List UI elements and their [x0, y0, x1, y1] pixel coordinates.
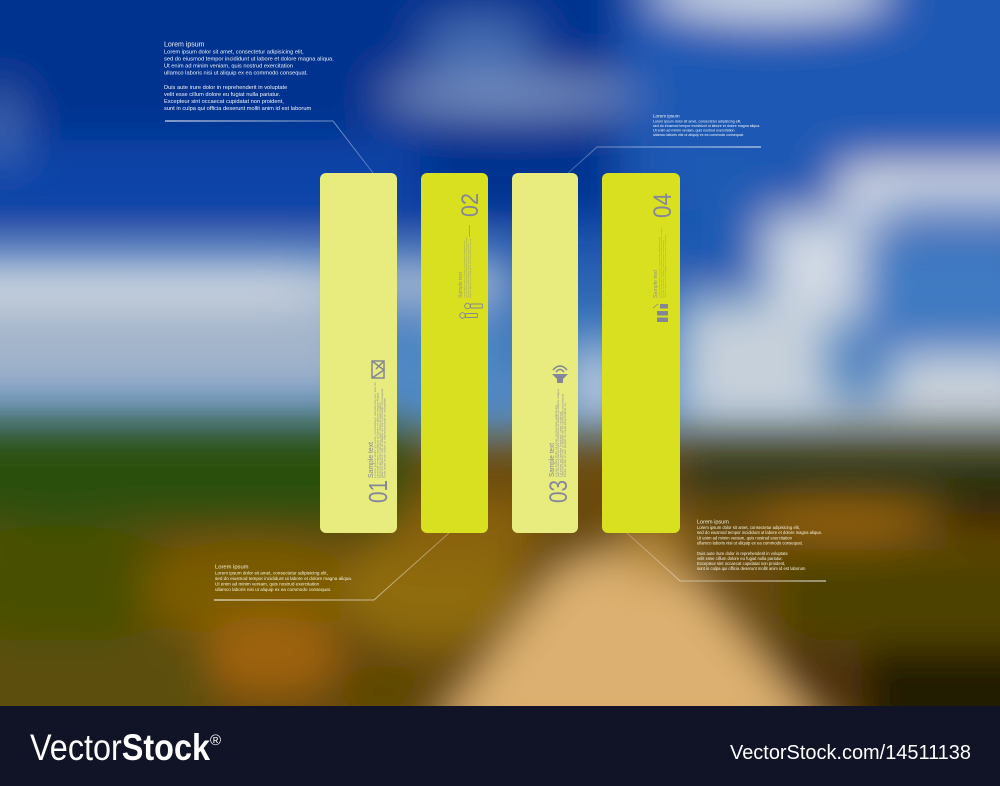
callout line: top right — [568, 147, 761, 173]
text block: top right: Ut enim ad minim veniam, quis nostrud exercitation — [653, 128, 734, 132]
body lines 3: sed do eiusmod tempor incididunt ut labore et dolore magna — [556, 388, 560, 477]
bar 4 — [602, 173, 680, 533]
text block: top left: Ut enim ad minim veniam, quis nostrud exercitation — [164, 64, 293, 70]
text block: bottom left: Ut enim ad minim veniam, quis nostrud exercitation — [215, 582, 320, 586]
number 03: 03 — [545, 480, 573, 503]
body lines 4: Lorem ipsum dolor sit amet, consectetur adipisicing elit, — [658, 236, 661, 298]
callout line: bottom left — [214, 533, 449, 600]
text block: top left: Duis aute irure dolor in reprehenderit in voluptate — [164, 85, 287, 91]
text block: top right: ullamco laboris nisi ut aliquip ex ea commodo consequat. — [653, 133, 744, 137]
bar 3 content — [545, 366, 573, 503]
sample text heading 2: Sample text — [458, 272, 464, 298]
body lines 2: Lorem ipsum dolor sit amet, consectetur adipisicing elit, — [463, 240, 466, 298]
callout line: top left — [165, 121, 373, 173]
body lines 2: Ut enim ad minim veniam, quis nostrud exercitation — [467, 242, 470, 298]
number 04: 04 — [649, 193, 677, 218]
body lines 4: Ut enim ad minim veniam, quis nostrud exercitation — [662, 239, 665, 298]
number 01: 01 — [363, 480, 393, 503]
body lines 3: ullamco laboris nisi ut aliquip ex ea commodo consequat. — [561, 393, 565, 477]
text block: top left: Lorem ipsum dolor sit amet, consectetur adipisicing elit, — [164, 50, 304, 56]
body lines 3: Lorem ipsum dolor sit amet, consectetur adipisicing — [554, 404, 558, 477]
body lines 1: eiusmod tempor incididunt ut labore et dolore magna aliqua. — [375, 392, 379, 478]
text block: top left — [164, 42, 334, 112]
body lines 1: Lorem ipsum dolor sit amet, consectetur adipisicing elit, sed do — [373, 381, 377, 478]
text block: bottom right: ullamco laboris nisi ut aliquip ex ea commodo consequat. — [697, 540, 803, 546]
text block: bottom left — [215, 564, 352, 592]
body lines 1: Duis aute irure dolor in reprehenderit in voluptate — [383, 397, 387, 478]
text block: bottom right: Lorem ipsum dolor sit amet, consectetur adipisicing elit, — [697, 525, 800, 530]
text block: top left: sed do eiusmod tempor incididunt ut labore et dolore magna aliqua. — [164, 56, 334, 62]
body lines 4: ullamco laboris nisi ut aliquip ex ea commodo consequat. — [664, 234, 667, 298]
text block: top right — [653, 114, 760, 137]
icon: wifi lamp — [552, 366, 568, 383]
sample text heading 1: Sample text — [368, 442, 375, 478]
text block: bottom right: Duis aute irure dolor in reprehenderit in voluptate — [697, 551, 788, 556]
text block: top left: Lorem ipsum — [164, 42, 205, 48]
bar 4 content — [649, 193, 677, 322]
bar 3 — [512, 173, 578, 533]
bar 2 content — [457, 193, 484, 318]
text block: bottom left: Lorem ipsum — [215, 564, 249, 570]
icon: bar chart — [653, 304, 668, 322]
text block: bottom left: sed do eiusmod tempor incididunt ut labore et dolore magna aliqua. — [215, 576, 352, 581]
divider line 2 — [468, 225, 471, 237]
number 02: 02 — [457, 193, 484, 217]
text block: bottom left: ullamco laboris nisi ut aliquip ex ea commodo consequat. — [215, 587, 331, 592]
body lines 4 — [658, 226, 667, 298]
icon: people — [460, 303, 482, 318]
body lines 2 — [463, 236, 472, 298]
bar 1 — [320, 173, 397, 533]
body lines 3: Ut enim ad minim veniam, quis nostrud — [558, 411, 562, 477]
body lines 1 — [373, 381, 387, 478]
text block: top right: sed do eiusmod tempor incididunt ut labore et dolore magna aliqua. — [653, 124, 760, 128]
sample text heading 4: Sample text — [653, 270, 659, 298]
text block: bottom right: velit esse cillum dolore eu fugiat nulla pariatur. — [697, 556, 783, 561]
callout line: bottom right — [627, 533, 826, 581]
body lines 1: Ut enim ad minim veniam, quis nostrud exercitation — [378, 401, 382, 478]
text block: top left: velit esse cillum dolore eu fugiat nulla pariatur. — [164, 92, 281, 98]
text block: top left: Excepteur sint occaecat cupidatat non proident, — [164, 99, 284, 105]
bar 2 — [421, 173, 488, 533]
bar 1 content — [363, 361, 393, 503]
text block: top left: sunt in culpa qui officia deserunt mollit anim id est laborum — [164, 106, 311, 112]
text block: bottom right: Lorem ipsum — [697, 520, 729, 526]
text block: bottom right: Excepteur sint occaecat cupidatat non proident, — [697, 561, 785, 566]
icon: envelope — [372, 361, 384, 378]
footer band — [0, 706, 1000, 786]
text block: bottom right: sed do eiusmod tempor incididunt ut labore et dolore magna aliqua. — [697, 530, 822, 535]
text block: top right: Lorem ipsum dolor sit amet, consectetur adipisicing elit, — [653, 120, 741, 124]
registered mark: ® — [210, 732, 221, 749]
image id: VectorStock.com/14511138 — [730, 742, 971, 764]
text block: bottom right — [697, 520, 822, 571]
body lines 4: sed do eiusmod tempor incididunt ut labore et dolore magna — [660, 226, 663, 298]
body lines 2: sed do eiusmod tempor incididunt ut labore et dolore magna — [465, 236, 468, 298]
body lines 3: Duis aute irure dolor in reprehenderit in — [563, 402, 567, 477]
body lines 1: ullamco laboris nisi ut aliquip ex ea commodo consequat. — [380, 388, 384, 478]
text block: top right: Lorem ipsum — [653, 114, 680, 118]
text block: bottom left: Lorem ipsum dolor sit amet, consectetur adipisicing elit, — [215, 570, 328, 576]
logo: VectorStock: VectorStock — [30, 727, 210, 768]
text block: top left: ullamco laboris nisi ut aliquip ex ea commodo consequat. — [164, 70, 308, 76]
body lines 2: ullamco laboris nisi ut aliquip ex ea commodo consequat. — [469, 238, 472, 298]
text block: bottom right: sunt in culpa qui officia deserunt mollit anim id est laborum — [697, 566, 806, 571]
sample text heading 3: Sample text — [549, 443, 556, 477]
text block: bottom right: Ut enim ad minim veniam, quis nostrud exercitation — [697, 536, 793, 540]
body lines 3 — [554, 388, 567, 477]
